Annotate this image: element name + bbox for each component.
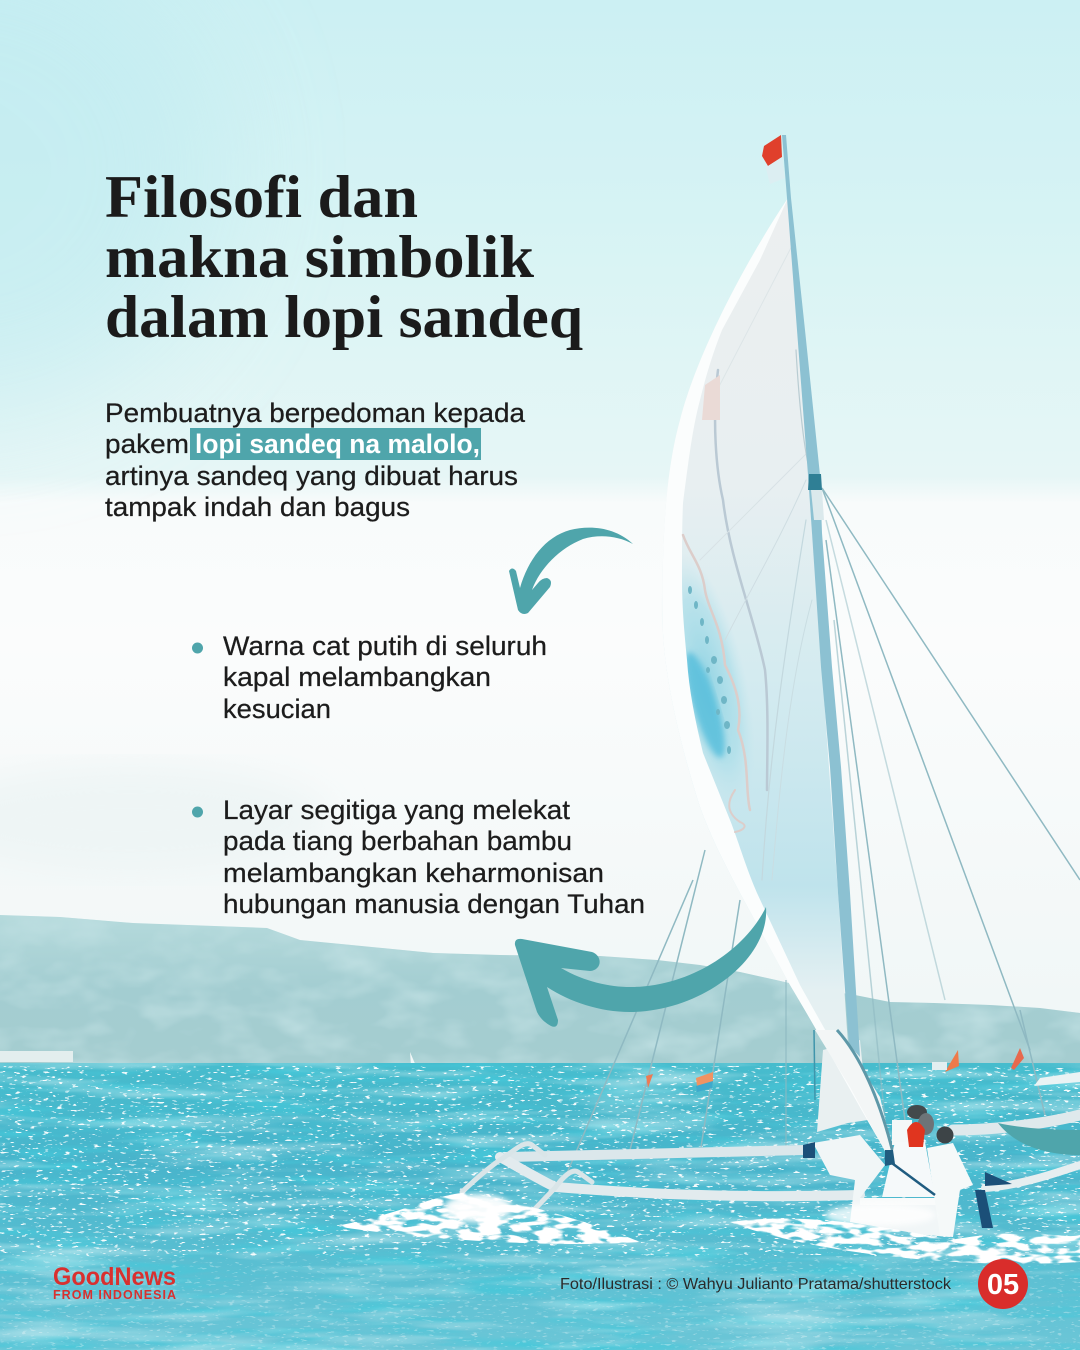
- page number badge: 05: [987, 1269, 1019, 1301]
- lower white sail panel: [815, 1030, 893, 1155]
- mast: [782, 135, 860, 1057]
- title: Filosofi dan: [105, 164, 418, 230]
- arrow: large curved arrow from sail: [515, 907, 766, 1027]
- logo: GoodNews from Indonesia: GoodNews: [53, 1263, 176, 1291]
- small distant flags: [646, 1048, 1080, 1092]
- bullet item: triangular sail: Layar segitiga yang melekat: [223, 795, 571, 825]
- bullet dot: [192, 642, 203, 654]
- bullet item: triangular sail: pada tiang berbahan bambu: [223, 826, 572, 856]
- lower rear sail: [817, 1040, 868, 1132]
- hull and deck: [813, 1135, 950, 1237]
- sailboat: [335, 135, 1080, 1264]
- bullet dot: [192, 806, 203, 818]
- highlighted phrase: lopi sandeq na malolo,: [195, 429, 480, 459]
- bullet item: white paint: kesucian: [223, 694, 331, 724]
- bullet item: white paint: [192, 631, 547, 724]
- main sail: [663, 198, 893, 1153]
- arrow: small curved arrow pointing to list: [509, 528, 633, 614]
- crew: [803, 1105, 1012, 1237]
- flag: [762, 135, 785, 184]
- bullet item: triangular sail: melambangkan keharmonisan: [223, 858, 604, 888]
- title: [105, 164, 583, 350]
- bullet item: triangular sail: hubungan manusia dengan Tuhan: [223, 889, 645, 919]
- bullet item: white paint: Warna cat putih di seluruh: [223, 631, 547, 661]
- photo credit: Foto/Ilustrasi : © Wahyu Julianto Pratama/shutterstock: [560, 1276, 952, 1293]
- logo: GoodNews from Indonesia: FROM INDONESIA: [53, 1288, 176, 1302]
- intro paragraph with highlight: Pembuatnya berpedoman kepada: [105, 398, 526, 428]
- intro paragraph with highlight: artinya sandeq yang dibuat harus: [105, 461, 518, 491]
- bullet item: white paint: kapal melambangkan: [223, 662, 491, 692]
- blue sail pattern: [642, 545, 774, 815]
- sail spine to stern: [837, 1030, 893, 1153]
- arrow fragment at right edge: [998, 1123, 1080, 1155]
- page number badge: [978, 1259, 1028, 1309]
- title: dalam lopi sandeq: [105, 284, 583, 350]
- intro paragraph with highlight: tampak indah dan bagus: [105, 492, 410, 522]
- intro paragraph with highlight: pakem: [105, 429, 189, 459]
- title: makna simbolik: [105, 224, 535, 290]
- bullet item: triangular sail: [192, 795, 645, 919]
- outriggers: [462, 1115, 1080, 1213]
- wake foam: [335, 1192, 1080, 1264]
- sail white edge: [663, 198, 893, 1153]
- logo: GoodNews from Indonesia: [53, 1263, 176, 1302]
- back rigging lines: [567, 488, 1080, 1173]
- sail seams: [683, 240, 812, 880]
- highlight bar: [190, 428, 481, 460]
- intro paragraph with highlight: [105, 398, 526, 522]
